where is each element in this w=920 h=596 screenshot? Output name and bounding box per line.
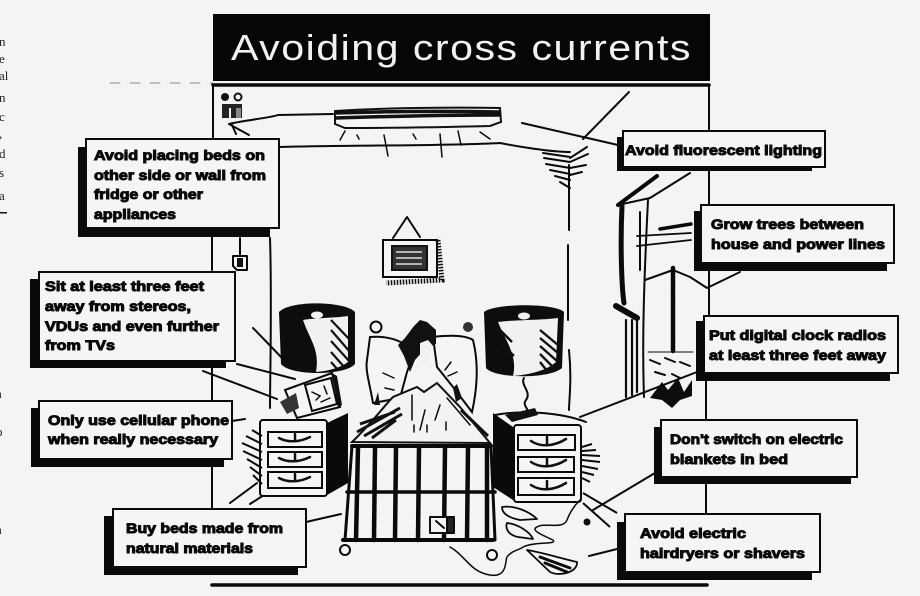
right nightstand (493, 408, 586, 502)
window and tree outside (580, 173, 740, 417)
callout: electric blankets: blankets in bed (670, 452, 788, 467)
title banner: Avoiding cross currents (231, 27, 692, 68)
callout: fluorescent lighting (617, 131, 825, 171)
callout: stereos and TVs: from TVs (45, 338, 115, 353)
callout: trees and power lines (694, 205, 894, 271)
icon: garden plants (650, 378, 692, 408)
callout: stereos and TVs: VDUs and even further (45, 319, 220, 334)
television (280, 373, 342, 418)
callout: hairdryers and shavers: Avoid electric (640, 526, 747, 541)
left nightstand floor hatching (242, 430, 262, 484)
right lamp (484, 305, 564, 412)
callout: stereos and TVs (30, 272, 235, 368)
callout: trees and power lines: Grow trees between (711, 217, 864, 232)
fluorescent light (335, 108, 501, 157)
hairdryer, shaver and cord (450, 500, 580, 575)
callout: cellular phone: when really necessary (47, 432, 219, 447)
callout: fluorescent lighting: Avoid fluorescent lighting (625, 143, 822, 158)
person in bed with pillows and bedspread (352, 320, 490, 443)
callout: hairdryers and shavers (617, 514, 820, 580)
title banner (213, 14, 710, 81)
callout: cellular phone: Only use cellular phone (48, 413, 230, 428)
picture on wall (383, 217, 442, 283)
callout: natural bed materials (104, 509, 306, 575)
callout: beds and appliances: other side or wall from (94, 168, 266, 183)
clipped newspaper column text (0, 34, 9, 537)
floor hatching by right nightstand (582, 444, 617, 527)
icon: two figures logo (221, 93, 242, 118)
callout: natural bed materials: Buy beds made from (126, 521, 283, 536)
callout: beds and appliances: appliances (94, 207, 176, 222)
callout: stereos and TVs: Sit at least three feet (45, 279, 205, 294)
left nightstand (260, 413, 348, 496)
callout: electric blankets (654, 420, 857, 484)
callout: beds and appliances (78, 139, 279, 237)
left lamp (279, 303, 355, 373)
callout: beds and appliances: Avoid placing beds on (94, 148, 265, 163)
callout: electric blankets: Don't switch on electric (670, 432, 844, 447)
ceiling wire (229, 114, 333, 135)
wall plug (233, 238, 247, 270)
callout: beds and appliances: fridge or other (94, 187, 204, 202)
callout: digital clock radios: at least three feet away (709, 348, 887, 363)
callout: digital clock radios: Put digital clock radios (709, 328, 886, 343)
callout: stereos and TVs: away from stereos, (45, 299, 191, 314)
room interior lines (230, 143, 570, 504)
wall corner hatching (543, 147, 588, 188)
room frame (110, 83, 709, 585)
callout: hairdryers and shavers: hairdryers or shavers (640, 546, 805, 561)
callout: cellular phone (31, 401, 232, 467)
television cables (203, 328, 295, 399)
callout: natural bed materials: natural materials (126, 541, 253, 556)
callout: digital clock radios (696, 316, 898, 381)
callout: trees and power lines: house and power lines (711, 237, 885, 252)
bed frame (340, 446, 497, 560)
leader lines (232, 92, 655, 556)
